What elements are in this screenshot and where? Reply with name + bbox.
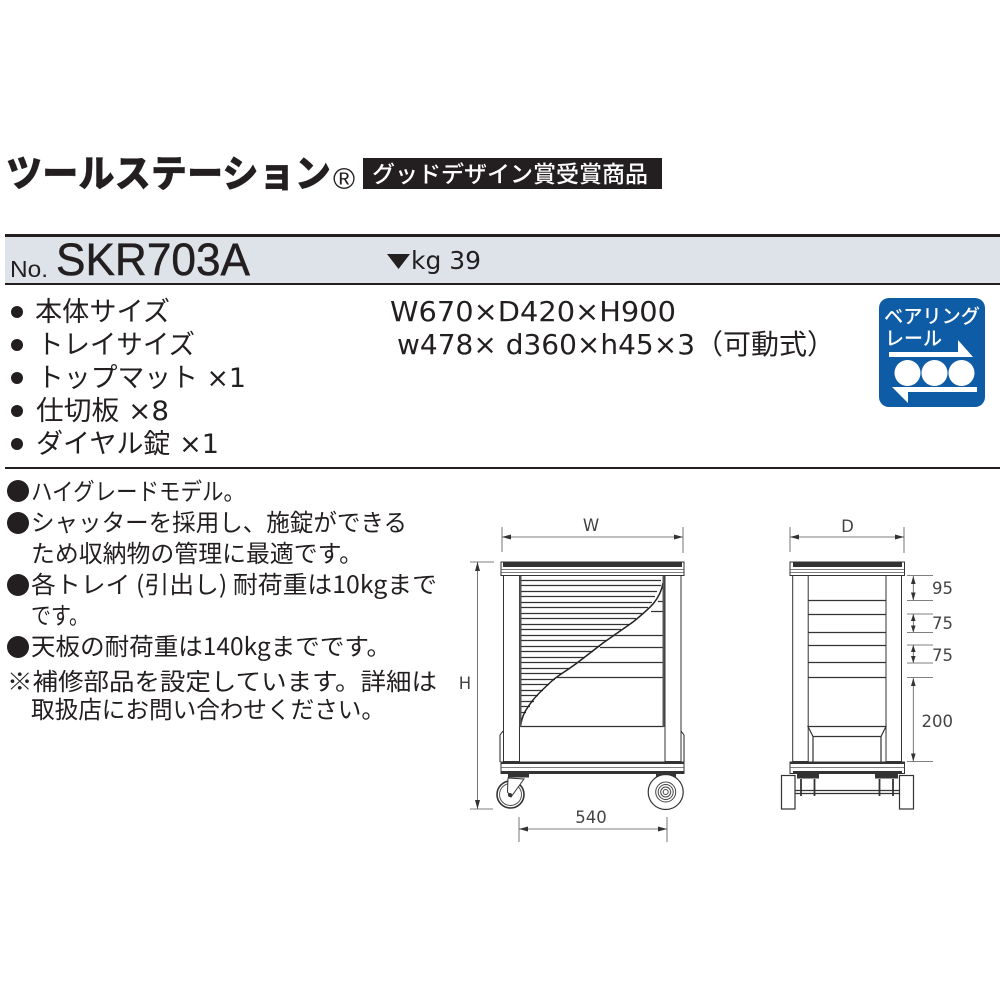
feature notes: [7, 472, 437, 725]
dimension H: H: [459, 674, 471, 693]
side wheels and axle: [782, 774, 914, 809]
shelf dimensions: [907, 576, 953, 762]
feature notes: 各トレイ (引出し) 耐荷重は10kgまで: [31, 565, 437, 600]
spec list labels: トップマット ×1: [37, 363, 246, 394]
side pillars: [793, 576, 902, 762]
feature notes: です。: [31, 596, 89, 631]
spec list labels: 本体サイズ: [35, 297, 170, 328]
award badge: グッドデザイン賞受賞商品: [372, 155, 648, 189]
feature notes: ※補修部品を設定しています。詳細は: [7, 662, 437, 697]
model header band: No.: [10, 256, 48, 282]
dimension 540: [519, 808, 667, 842]
spec values: [390, 295, 835, 361]
feature notes: 取扱店にお問い合わせください。: [31, 690, 385, 725]
cabinet top: [501, 562, 684, 576]
model header band: SKR703A: [56, 234, 250, 285]
dimension H: [459, 562, 494, 809]
model header band: kg 39: [411, 246, 481, 275]
shutter curve: [520, 583, 663, 727]
front view drawing: [459, 516, 684, 842]
feature notes: ハイグレードモデル。: [31, 472, 245, 507]
side top: [790, 562, 904, 576]
icon: bearing rail: レール: [885, 322, 942, 351]
spec list labels: 仕切板 ×8: [36, 396, 169, 427]
feature notes: 天板の耐荷重は140kgまでです。: [31, 627, 391, 662]
spec values: W670×D420×H900: [390, 295, 676, 328]
spec list labels: ダイヤル錠 ×1: [36, 429, 219, 460]
title: ツールステーション: [6, 143, 331, 198]
cabinet base: [501, 762, 684, 774]
dimension W: [502, 516, 683, 553]
drawer lines: [520, 602, 664, 726]
title: ®: [333, 163, 355, 196]
icon: bearing rail: [879, 298, 985, 407]
pillars: [500, 576, 684, 762]
side drawer lines: [808, 600, 886, 678]
icon: bearing rail: ベアリング: [884, 300, 980, 329]
dimension D: [790, 517, 904, 553]
dimension W: W: [583, 516, 599, 535]
spec values: w478× d360×h45×3（可動式）: [397, 328, 835, 361]
model header band: [5, 234, 1000, 285]
side base: [790, 762, 904, 774]
side view drawing: [782, 517, 953, 809]
shelf dimensions: 95: [932, 579, 953, 598]
divider: [5, 467, 1000, 469]
shelf dimensions: 200: [922, 712, 953, 731]
dimension 540: 540: [575, 808, 607, 827]
shelf dimensions: 75: [932, 614, 953, 633]
fixed wheel: [648, 774, 683, 810]
side tray: [808, 726, 886, 762]
feature notes: ため収納物の管理に最適です。: [31, 534, 363, 569]
shelf dimensions: 75: [932, 646, 953, 665]
spec list labels: [11, 297, 246, 460]
shutter slats: [521, 580, 661, 712]
swivel caster: [497, 774, 529, 808]
spec list labels: トレイサイズ: [37, 330, 195, 361]
dimension D: D: [841, 517, 854, 536]
feature notes: シャッターを採用し、施錠ができる: [31, 503, 407, 538]
